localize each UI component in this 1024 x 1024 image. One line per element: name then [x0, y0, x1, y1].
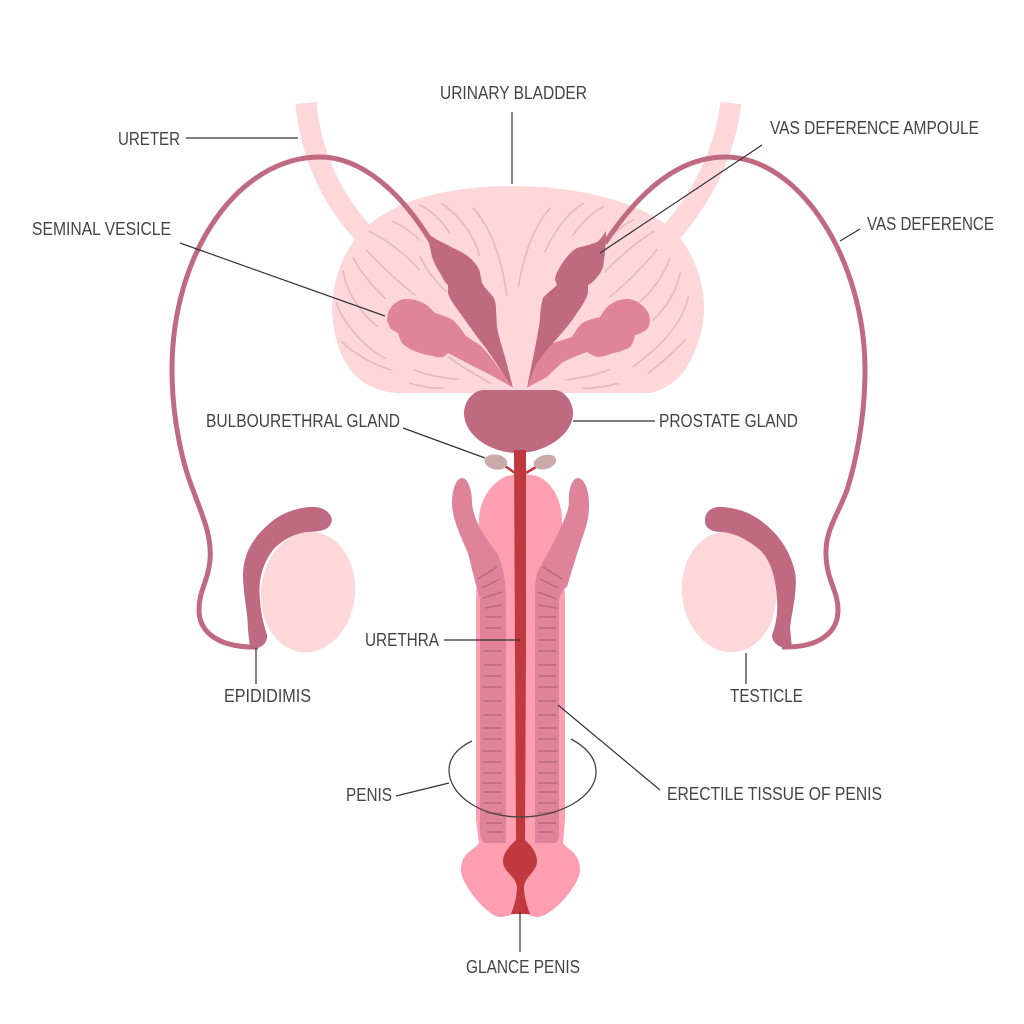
erectile tissue left	[452, 478, 506, 843]
epididymis left	[243, 507, 332, 648]
ureter left	[306, 103, 368, 238]
testicle left	[255, 527, 361, 657]
penis circumference marker	[449, 739, 596, 817]
vas deference right	[605, 157, 865, 647]
label: prostate gland: PROSTATE GLAND	[659, 411, 798, 431]
bulbourethral gland right	[526, 452, 558, 473]
label: urethra: URETHRA	[365, 630, 439, 650]
label: epididimis	[224, 648, 311, 706]
ureter right	[668, 103, 731, 236]
urinary bladder	[332, 186, 704, 393]
label: vas deference ampoule	[600, 118, 979, 253]
label: epididimis: EPIDIDIMIS	[224, 686, 311, 706]
striations left	[478, 567, 503, 832]
bladder muscle striations	[337, 203, 688, 388]
epididymis right	[705, 507, 796, 648]
vas deference ampoule left	[427, 233, 513, 388]
label: vas deference: VAS DEFERENCE	[867, 214, 994, 234]
striations right	[538, 567, 562, 832]
label: glance penis: GLANCE PENIS	[466, 957, 580, 977]
bulbourethral gland left	[483, 453, 515, 473]
label: testicle: TESTICLE	[730, 686, 803, 706]
erectile tissue right	[535, 478, 589, 843]
vas deference ampoule right	[527, 231, 606, 388]
seminal vesicle left	[387, 299, 513, 388]
label: penis: PENIS	[346, 785, 392, 805]
testicle right	[676, 527, 782, 657]
label: erectile tissue of penis: ERECTILE TISSUE OF PENIS	[667, 784, 882, 804]
urethra	[503, 450, 537, 914]
vas deference left	[172, 157, 432, 647]
label: testicle	[730, 653, 803, 706]
label: erectile tissue of penis	[558, 705, 882, 804]
label: seminal vesicle	[32, 219, 385, 316]
penis body and glans	[461, 474, 580, 917]
label: bulbourethral gland: BULBOURETHRAL GLAND	[206, 411, 400, 431]
label: vas deference ampoule: VAS DEFERENCE AMPOULE	[770, 118, 979, 138]
label: glance penis	[466, 912, 580, 977]
label: ureter: URETER	[118, 129, 180, 149]
seminal vesicle right	[527, 299, 650, 388]
label: seminal vesicle: SEMINAL VESICLE	[32, 219, 171, 239]
prostate gland	[464, 390, 573, 453]
label: vas deference	[840, 214, 994, 241]
label: urinary bladder: URINARY BLADDER	[440, 83, 587, 103]
label: bulbourethral gland	[206, 411, 485, 458]
label: penis	[346, 783, 449, 805]
